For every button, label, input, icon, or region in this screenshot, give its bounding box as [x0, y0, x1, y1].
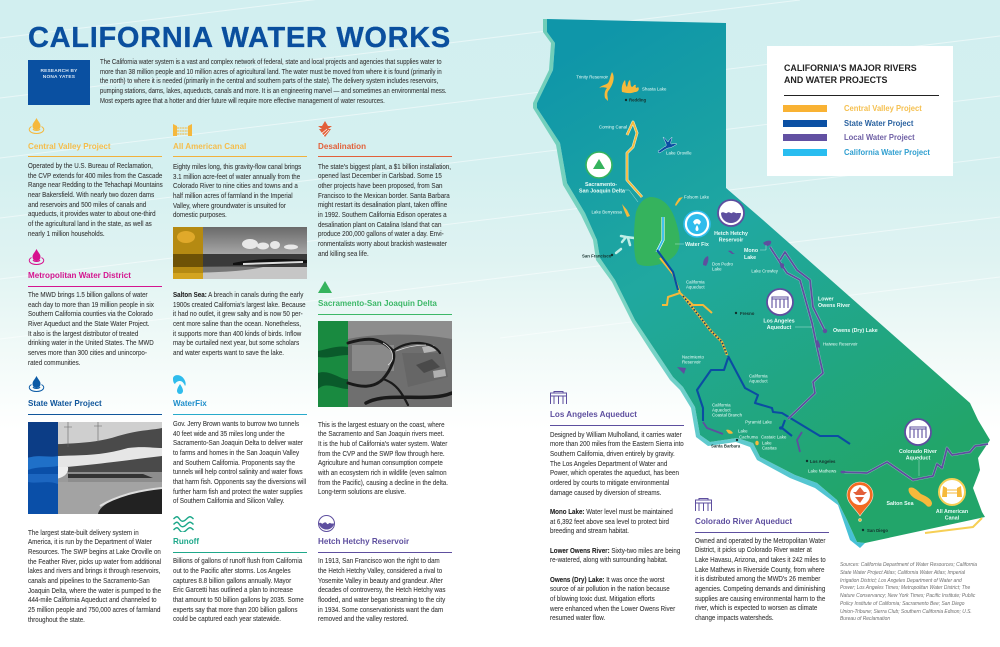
map icon: Hetch Hetchy	[718, 200, 744, 226]
text: Mono Lake: Water level must be maintained	[550, 507, 673, 516]
rule	[318, 156, 452, 157]
text: ronmentalists worry about brackish wastewater	[318, 239, 447, 248]
text: in 1992. Southern California Edison operates a	[318, 210, 447, 219]
sources note: Nature Conservancy; New York Times; Pacific Institute; Public	[840, 593, 975, 599]
icon: desalination	[318, 121, 332, 137]
icon: drop	[28, 376, 44, 392]
map labels: Fresno	[740, 311, 755, 316]
map labels: Canal	[945, 516, 960, 522]
sources note: Power; Los Angeles Times; Metropolitan Water District; The	[840, 585, 970, 591]
text: each day to more than 19 million people in six	[28, 300, 154, 309]
text: that harm fish. Opponents say the diversions will	[173, 477, 306, 486]
text: half million acres of farmland in the Imperial	[173, 191, 293, 200]
text: and killing sea life.	[318, 249, 369, 258]
text: The MWD brings 1.5 billion gallons of water	[28, 290, 148, 299]
map labels: Salton Sea	[886, 501, 914, 507]
WaterFix tunnel	[657, 217, 663, 252]
Salton Sea text: and water experts want to save the lake.	[173, 348, 284, 357]
text: from the Pacific), causing a decline in the delta.	[318, 478, 448, 487]
text: River Aqueduct and the State Water Project.	[28, 319, 149, 328]
text: at 6,392 feet above sea level to protect bird	[550, 517, 669, 526]
heading: All American Canal	[173, 140, 246, 150]
text: aqueducts, it provides water to about one-third	[28, 209, 156, 218]
text: Range near Redding to the Tehachapi Mountains	[28, 180, 163, 189]
icon: aqueduct	[550, 391, 567, 404]
text: lakes and rivers and brings it through reservoirs,	[28, 566, 160, 575]
text: 25 million people and 750,000 acres of farmland	[28, 605, 160, 614]
panel: Metropolitan Water District	[28, 249, 162, 367]
text	[318, 420, 448, 496]
map labels: Casitas	[762, 446, 777, 450]
map icon: Desalination pin	[847, 482, 873, 522]
panel: Los Angeles Aqueduct	[550, 391, 684, 622]
text: Designed by William Mulholland, it carries water	[550, 430, 682, 439]
map icon: Delta	[586, 152, 612, 178]
map labels: Castaic Lake	[761, 434, 787, 440]
sources note: Union-Tribune; Sierra Club; Southern California Edison; U.S.	[840, 608, 972, 614]
rule	[28, 414, 162, 415]
text	[318, 556, 446, 623]
map labels: Cachuma	[739, 434, 758, 440]
text: the Sacramento and San Joaquin rivers meet.	[318, 429, 444, 438]
map icon: All American Canal	[939, 479, 965, 505]
map labels: Lake Crowley	[751, 268, 779, 274]
legend title	[784, 63, 917, 84]
map labels: Folsom Lake	[684, 194, 710, 200]
map labels: Colorado River	[899, 449, 937, 455]
map labels: Reservoir	[682, 360, 701, 364]
text	[550, 430, 684, 622]
text: Eighty miles long, this gravity-flow canal brings	[173, 162, 301, 171]
text: flooded, and water began streaming to the city	[318, 595, 445, 604]
legend: Central Valley Project: Central Valley Project	[844, 104, 922, 113]
text: change impacts watersheds.	[695, 613, 774, 622]
rule	[173, 414, 307, 415]
text: America, it is run by the Department of Water	[28, 537, 152, 546]
sources note: Policy Institute of California; Sacramento Bee; San Diego	[840, 601, 965, 607]
text: out to the Pacific after storms. Los Angeles	[173, 566, 291, 575]
state outline	[537, 19, 990, 543]
text: Southern California counties via the Colorado	[28, 309, 153, 318]
text: desalination plant on Catalina Island that can	[318, 220, 441, 229]
text: throughout the state.	[28, 615, 85, 624]
map labels: Water Fix	[685, 242, 709, 248]
title: CALIFORNIA WATER WORKS	[28, 22, 451, 54]
photo: delta	[318, 321, 452, 407]
panel: State Water Project	[28, 376, 162, 624]
text	[173, 419, 306, 505]
heading: State Water Project	[28, 398, 102, 408]
map labels: Nacimiento	[682, 354, 705, 360]
text: Lake Mathews in Riverside County, from where	[695, 565, 825, 574]
sources note	[840, 562, 977, 622]
text: river, which is expected to worsen as climate	[695, 603, 817, 612]
map of California	[533, 19, 990, 548]
Salton Sea text: may be curtailed next year, but some scholars	[173, 338, 299, 347]
panel: Colorado River Aqueduct	[695, 498, 829, 622]
text: of blowing toxic dust. Mitigation efforts	[550, 594, 655, 603]
map labels: Aqueduct	[749, 378, 768, 384]
heading: Los Angeles Aqueduct	[550, 408, 637, 418]
rule	[173, 552, 307, 553]
map labels: Pyramid Lake	[745, 420, 773, 424]
text: Yosemite Valley in beauty and grandeur. After	[318, 576, 443, 585]
map labels: San Joaquin Delta	[579, 188, 625, 194]
map labels: Lake	[738, 428, 748, 434]
heading: Central Valley Project	[28, 140, 111, 150]
icon: triangle	[318, 281, 332, 293]
city dots	[611, 99, 864, 531]
map labels: Aqueduct	[686, 284, 705, 290]
icon: aqueduct	[695, 498, 712, 511]
text	[28, 528, 161, 624]
text: ordered by courts to mitigate environmental	[550, 478, 669, 487]
photo: Salton Sea	[173, 227, 307, 279]
map labels: Lake Berryessa	[591, 210, 623, 214]
map labels: Lake	[712, 266, 722, 272]
map labels: Reservoir	[719, 238, 743, 244]
legend title: AND WATER PROJECTS	[784, 74, 887, 84]
map labels: Sacramento-	[585, 182, 617, 188]
Local water project lines	[770, 247, 988, 480]
heading: WaterFix	[173, 398, 207, 408]
map labels: Aqueduct	[767, 325, 791, 331]
text: serves more than 300 cities and unincorpo-	[28, 348, 147, 357]
connector lines	[625, 190, 919, 476]
legend: Central Valley Project	[783, 105, 933, 113]
text: rated communities.	[28, 358, 80, 367]
text: with an ecosystem rich in wildlife (even salmon	[318, 468, 447, 477]
text: further harm fish and protect the water supplies	[173, 487, 303, 496]
text: removed and the valley restored.	[318, 614, 408, 623]
text: might restart its desalination plant, taken offline	[318, 200, 447, 209]
rule	[28, 286, 162, 287]
intro text	[100, 57, 447, 105]
text: Colorado River to nine cities and towns and a	[173, 181, 298, 190]
map labels: San Francisco	[582, 254, 612, 258]
text: near Bakersfield. With nearly two dozen dams	[28, 190, 154, 199]
State Water Project aqueduct	[657, 250, 850, 444]
text: from the CVP and the SWP flow through here.	[318, 449, 445, 458]
map labels: Los Angeles	[810, 459, 836, 464]
icon: drop	[28, 249, 44, 265]
text: the CVP extends for 400 miles from the Cascade	[28, 171, 162, 180]
map labels: Haiwee Reservoir	[823, 342, 858, 346]
panel: Hetch Hetchy Reservoir	[318, 515, 452, 623]
text: It is the hub of California’s water system. Water	[318, 439, 447, 448]
text: source of air pollution in the nation because	[550, 584, 670, 593]
delta region	[634, 197, 680, 266]
text: Billions of gallons of runoff flush from California	[173, 556, 302, 565]
map labels: Lake	[744, 255, 756, 261]
text: other projects have been proposed, from San	[318, 181, 442, 190]
map labels: Shasta Lake	[642, 86, 667, 92]
text: of Southern California and Silicon Valley.	[173, 496, 284, 505]
legend: Local Water Project: Local Water Project	[844, 133, 915, 142]
intro text: pumping stations, dams, lakes, aqueducts, canals and more. It is an engineering marvel — and sometimes an environmental mess.	[100, 86, 447, 95]
Salton Sea text	[173, 290, 306, 357]
map labels: Corning Canal	[599, 124, 627, 130]
map labels: California	[686, 280, 705, 284]
text: Operated by the U.S. Bureau of Reclamation,	[28, 161, 153, 170]
map labels: Aqueduct	[712, 408, 731, 412]
text: opened last December in Carlsbad. Some 15	[318, 171, 442, 180]
text: breeding and stream habitat.	[550, 526, 629, 535]
text: supplies are causing environmental harm to the	[695, 594, 825, 603]
text: drinking water in the United States. The MWD	[28, 338, 154, 347]
map labels: Mono	[744, 248, 759, 254]
text: that amount to 50 billion gallons by 2035. Some	[173, 595, 304, 604]
intro text: more than 38 million people and 10 million acres of agricultural land. The water must be moved from where it is found (primarily in	[100, 67, 442, 76]
icon: drop	[28, 118, 44, 134]
text: 40 feet wide and 35 miles long under the	[173, 429, 285, 438]
legend	[767, 46, 953, 176]
text	[695, 536, 826, 622]
map labels: Santa Barbara	[711, 444, 741, 448]
text: 3.1 million acre-feet of water annually from the	[173, 172, 300, 181]
text: It also is the largest distributor of treated	[28, 329, 138, 338]
text: and Southern California. Proponents say the	[173, 458, 295, 467]
text: it is distributed among the MWD’s 26 member	[695, 574, 820, 583]
panel: Central Valley Project	[28, 118, 163, 238]
byline box: NONA YATES	[43, 75, 75, 80]
map labels: Trinity Reservoir	[576, 74, 609, 80]
text: domestic purposes.	[173, 210, 227, 219]
text: The Los Angeles Department of Water and	[550, 459, 667, 468]
text: Resources. The SWP begins at Lake Oroville on	[28, 547, 161, 556]
map labels: Lake	[762, 440, 772, 446]
map labels: Lake Mathews	[808, 468, 837, 474]
legend: California Water Project: California Water Project	[844, 148, 930, 157]
text: were enhanced when the Lower Owens River	[550, 604, 675, 612]
icon: WaterFix	[173, 375, 186, 394]
text: Gov. Jerry Brown wants to burrow two tunnels	[173, 419, 299, 428]
text: Agriculture and human consumption compete	[318, 458, 443, 467]
text: more than 200 miles from the Eastern Sierra into	[550, 439, 684, 448]
All American Canal line	[925, 518, 982, 533]
heading: Sacramento-San Joaquin Delta	[318, 298, 437, 308]
rule	[318, 552, 452, 553]
byline box	[28, 60, 90, 105]
map labels: All American	[936, 509, 968, 515]
intro text: Most experts agree that a hotter and drier future will require more effective management of water resources.	[100, 96, 385, 105]
map labels: Redding	[629, 98, 647, 102]
text: Lake Havasu, Arizona, and takes it 242 miles to	[695, 555, 826, 564]
panel: Desalination	[318, 121, 452, 258]
text	[28, 290, 154, 367]
intro text: The California water system is a vast and complex network of federal, state and local projects and agencies that supplies water to	[100, 57, 442, 66]
icon: reservoir	[318, 515, 335, 532]
map labels: Don Pedro	[712, 262, 734, 266]
heading: Desalination	[318, 140, 366, 150]
text: Owned and operated by the Metropolitan Water	[695, 536, 825, 545]
map icon: Water Fix	[684, 211, 710, 237]
text: Owens (Dry) Lake: It was once the worst	[550, 575, 664, 584]
map labels: San Diego	[867, 528, 888, 533]
rule	[695, 532, 829, 533]
text: the Hetch Hetchy Valley, considered a rival to	[318, 566, 442, 575]
legend rule	[784, 95, 939, 96]
text: Eric Garcetti has outlined a plan to increase	[173, 585, 293, 594]
text	[28, 161, 163, 238]
map labels: Owens River	[818, 303, 850, 309]
Salton Sea text: Salton Sea: A breach in canals during the early	[173, 290, 303, 299]
text: Sacramento-San Joaquin Delta to deliver water	[173, 438, 303, 447]
heading: Colorado River Aqueduct	[695, 516, 792, 526]
legend: California Water Project	[783, 149, 933, 157]
icon: canal	[173, 124, 192, 136]
map labels	[576, 74, 968, 533]
map icon: Colorado River Aqueduct	[905, 419, 931, 445]
heading: Runoff	[173, 536, 199, 546]
map labels: Lower	[818, 296, 834, 302]
map labels: Los Angeles	[763, 318, 795, 324]
legend: Local Water Project	[783, 134, 933, 142]
intro text: the north) to where it is needed (primarily in the central and southern parts of the state). The delivery system includes reservoirs,	[100, 76, 438, 85]
text: canals and pipelines to the Sacramento-San	[28, 576, 150, 585]
text: experts say that more than 200 billion gallons	[173, 605, 297, 614]
text: and reservoirs and 500 miles of canals and	[28, 200, 146, 209]
panel: All American Canal	[173, 124, 307, 357]
text: The state’s biggest plant, a $1 billion installation,	[318, 162, 451, 171]
text: captures 8.8 billion gallons annually. Mayor	[173, 576, 291, 585]
panel: WaterFix	[173, 375, 307, 505]
text: Francisco to the Mexican border. Santa Barbara	[318, 191, 450, 200]
text: could be captured each year statewide.	[173, 614, 281, 623]
text: re-watered, along with surrounding habitat.	[550, 555, 668, 564]
rule	[173, 156, 307, 157]
sources note: State Water Project Atlas; California Water Atlas; Imperial	[840, 570, 965, 576]
map labels: Hetch Hetchy	[714, 231, 748, 237]
text: In 1913, San Francisco won the right to dam	[318, 556, 440, 565]
text: Power, which operates the aqueduct, has been	[550, 468, 679, 477]
sources note: Irrigation District; Los Angeles Department of Water and	[840, 578, 962, 584]
text: Long-term solutions are elusive.	[318, 487, 406, 496]
coastline edge	[533, 19, 865, 548]
icon: waves	[173, 516, 194, 532]
text: nearly 1 million households.	[28, 229, 105, 238]
map labels: Coastal Branch	[712, 412, 743, 418]
byline box: RESEARCH BY	[40, 69, 78, 74]
rule	[550, 424, 684, 426]
panel: Sacramento-San Joaquin Delta	[318, 281, 452, 496]
Central Valley Project canals	[627, 122, 727, 434]
heading: Hetch Hetchy Reservoir	[318, 536, 409, 546]
legend: State Water Project: State Water Project	[844, 119, 913, 128]
Salton Sea text: it supports more than 400 kinds of birds. Inflow	[173, 329, 301, 338]
text: damage caused by diversion of streams.	[550, 488, 661, 497]
text: tunnels will help control salinity and water flows	[173, 467, 303, 476]
photo: aqueduct	[28, 422, 162, 514]
text: Southern California, driven entirely by gravity.	[550, 449, 675, 458]
map labels: Lake Oroville	[666, 150, 692, 156]
map labels: Owens (Dry) Lake	[833, 328, 878, 334]
text: agencies. Competing demands and diminishing	[695, 584, 825, 593]
sources note: Bureau of Reclamation	[840, 616, 890, 622]
text: The largest state-built delivery system in	[28, 528, 139, 537]
text: resumed water flow.	[550, 613, 605, 622]
sources note: Sources: California Department of Water Resources; California	[840, 562, 977, 568]
text: Lower Owens River: Sixty-two miles are being	[550, 546, 680, 555]
text: decades of controversy, the Hetch Hetchy was	[318, 585, 445, 594]
text: District, it picks up Colorado River water at	[695, 545, 812, 554]
map labels: California	[712, 402, 731, 408]
legend title: CALIFORNIA’S MAJOR RIVERS	[784, 63, 917, 73]
lakes and reservoirs	[599, 72, 932, 507]
text	[318, 162, 451, 258]
text: of the agricultural land in the state, as well as	[28, 219, 152, 228]
Salton Sea text: 1900s created California’s largest lake. Because	[173, 300, 306, 309]
Salton Sea text: cent more saline than the ocean. Nonetheless,	[173, 319, 301, 328]
text	[173, 556, 304, 623]
text	[173, 162, 301, 219]
text: Joaquin Delta, where the water is pumped to the	[28, 586, 161, 595]
rule	[318, 314, 452, 315]
heading: Metropolitan Water District	[28, 270, 131, 280]
Salton Sea text: it had no outlet, it grew salty and is now 50 per-	[173, 309, 303, 318]
text: in 1934. Some conservationists want the dam	[318, 605, 443, 614]
rule	[28, 156, 162, 157]
text: to farms and homes in the San Joaquin Valley	[173, 448, 299, 457]
map icon: LA Aqueduct	[767, 289, 793, 315]
map labels: California	[749, 374, 768, 378]
legend: State Water Project	[783, 120, 933, 128]
text: produce 200,000 gallons of water a day. Envi-	[318, 229, 444, 238]
text: Valley, where groundwater is unsuited for	[173, 201, 286, 210]
San Francisco Bay	[616, 236, 634, 253]
text: This is the largest estuary on the coast, where	[318, 420, 445, 429]
panel: Runoff	[173, 516, 307, 623]
map labels: Aqueduct	[906, 456, 930, 462]
text: 444-mile California Aqueduct and channeled to	[28, 595, 157, 604]
text: the Feather River, picks up water from additional	[28, 557, 161, 566]
